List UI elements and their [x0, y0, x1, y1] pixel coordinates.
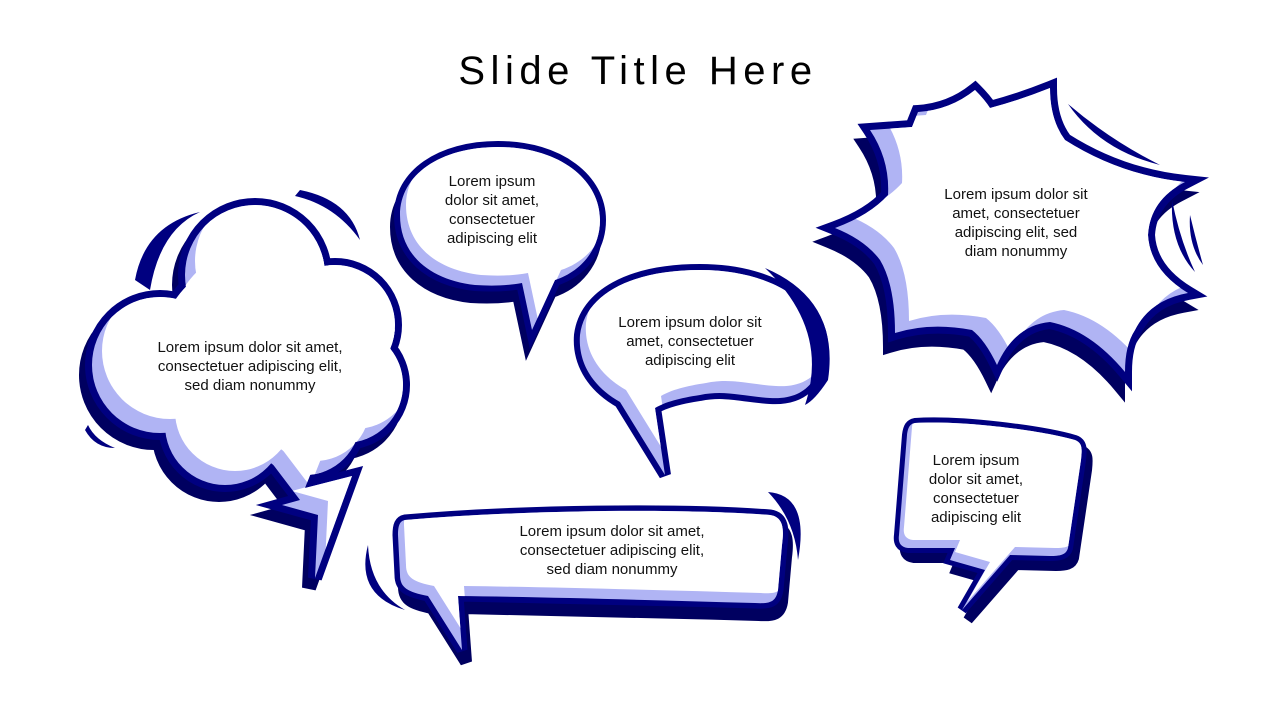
- text: small: dolor sit amet,: [929, 471, 1023, 488]
- text: middle: Lorem ipsum dolor sit: [618, 314, 763, 331]
- text: oval: dolor sit amet,: [445, 192, 539, 209]
- text: rectangle: consectetuer adipiscing elit,: [520, 542, 704, 559]
- text: middle: adipiscing elit: [645, 352, 736, 369]
- text: oval: Lorem ipsum: [449, 173, 535, 190]
- panel: cloud bubble: [85, 190, 413, 588]
- text: oval: consectetuer: [449, 211, 535, 228]
- panel: small square bubble: [899, 414, 1088, 620]
- text: burst: adipiscing elit, sed: [955, 224, 1077, 241]
- text: cloud: consectetuer adipiscing elit,: [158, 358, 342, 375]
- title: Slide Title Here: [458, 49, 818, 93]
- text: burst: diam nonummy: [965, 243, 1068, 260]
- text: small: consectetuer: [933, 490, 1019, 507]
- text: burst: amet, consectetuer: [952, 205, 1080, 222]
- text: cloud: Lorem ipsum dolor sit amet,: [157, 339, 343, 356]
- panel: burst bubble: [829, 76, 1203, 386]
- text: middle: amet, consectetuer: [626, 333, 754, 350]
- text: oval: adipiscing elit: [447, 230, 538, 247]
- panel: oval bubble: [396, 137, 606, 342]
- text: cloud: sed diam nonummy: [185, 377, 316, 394]
- text: burst: Lorem ipsum dolor sit: [944, 186, 1089, 203]
- text: rectangle: Lorem ipsum dolor sit amet,: [519, 523, 705, 540]
- text: rectangle: sed diam nonummy: [547, 561, 678, 578]
- text: small: adipiscing elit: [931, 509, 1022, 526]
- panel: middle bubble: [580, 258, 830, 475]
- panel: rectangle bubble: [365, 492, 801, 662]
- text: small: Lorem ipsum: [933, 452, 1019, 469]
